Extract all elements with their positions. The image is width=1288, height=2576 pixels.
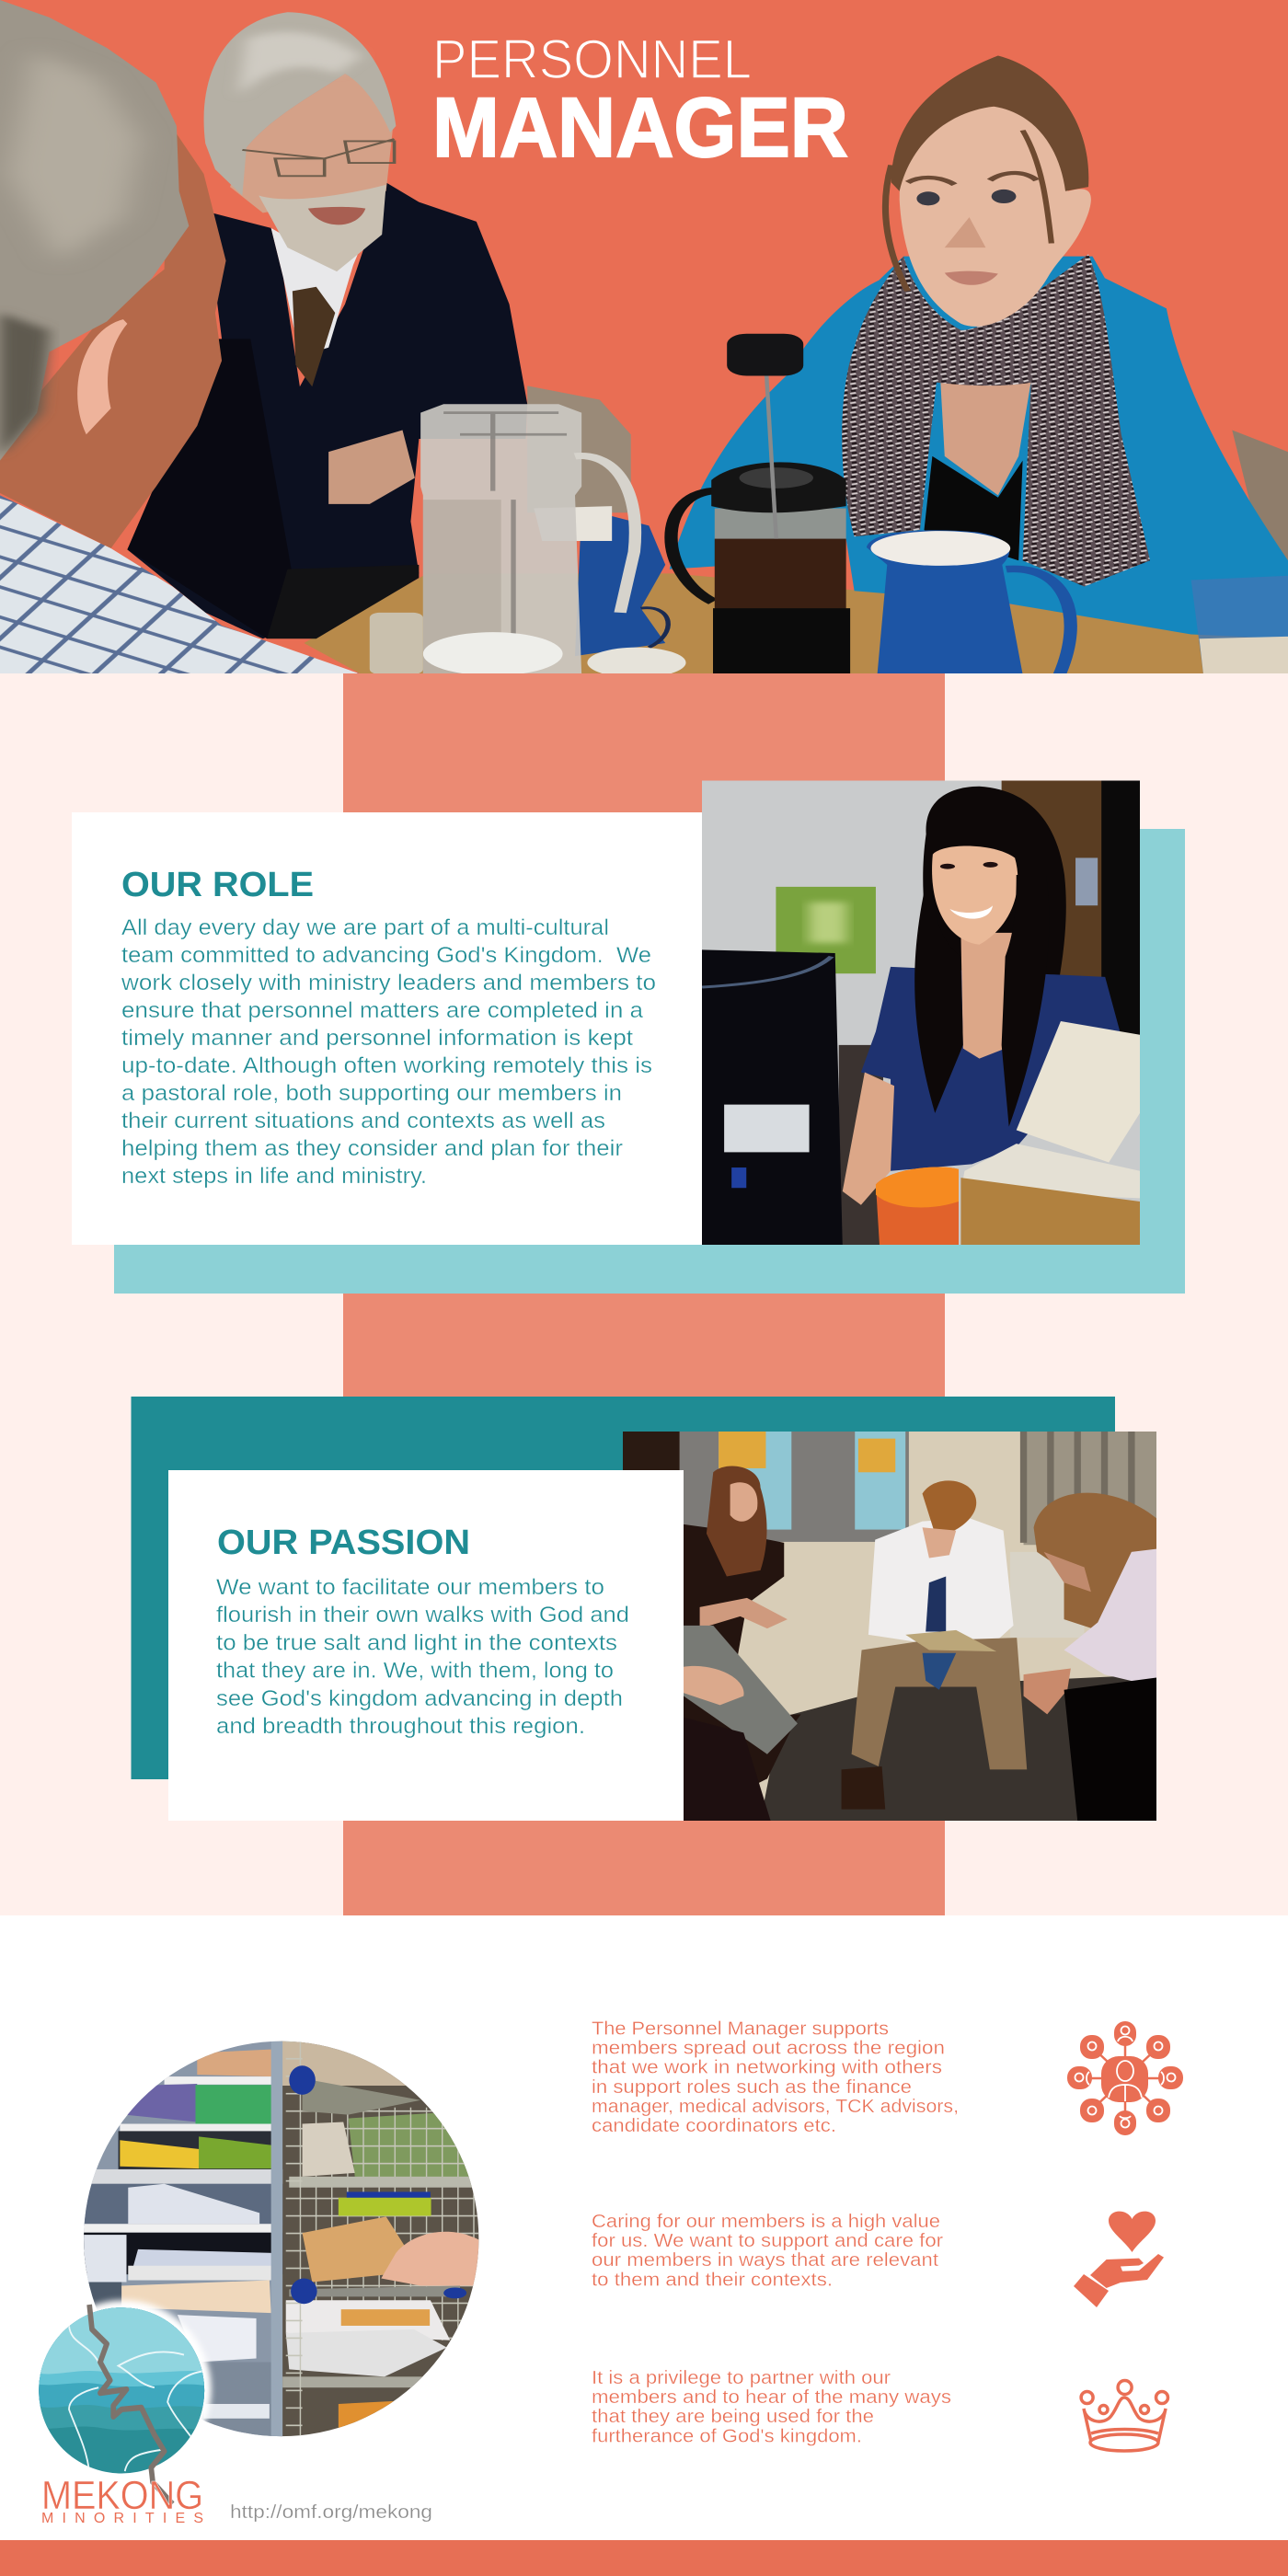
man in sweater — [127, 12, 527, 638]
logo: Mekong Minorities — [39, 2295, 215, 2504]
photo: smiling woman at desk — [702, 780, 1140, 1245]
wordmark: MEKONG: MEKONG — [41, 2473, 203, 2518]
text: support network: in support roles such as the finance — [592, 2077, 912, 2098]
text: caring: Caring for our members is a high value — [592, 2212, 940, 2232]
teal backing block — [114, 829, 1185, 1294]
role body text: next steps in life and ministry. — [121, 1164, 427, 1189]
passion body text: to be true salt and light in the contexts — [216, 1630, 617, 1656]
role body text: up-to-date. Although often working remotely this is — [121, 1053, 652, 1078]
laptop — [127, 339, 300, 638]
text: caring: for us. We want to support and care for — [592, 2231, 943, 2251]
role body text: ensure that personnel matters are completed in a — [121, 998, 644, 1023]
role body text — [121, 915, 656, 1189]
text: support network: manager, medical advisors, TCK advisors, — [592, 2097, 959, 2117]
heading: our passion: OUR PASSION — [217, 1524, 470, 1562]
role body text: their current situations and contexts as well as — [121, 1109, 605, 1133]
white text card — [168, 1470, 684, 1821]
role body text: a pastoral role, both supporting our members in — [121, 1081, 622, 1106]
heading: our role: OUR ROLE — [121, 866, 314, 904]
text: caring — [592, 2212, 943, 2290]
passion body text: see God's kingdom advancing in depth — [216, 1686, 623, 1711]
passion body text: and breadth throughout this region. — [216, 1714, 585, 1739]
logo wordmark — [41, 2473, 203, 2526]
passion body text: that they are in. We, with them, long to — [216, 1658, 614, 1684]
url: http://omf.org/mekong — [230, 2502, 432, 2523]
background: pale pink middle section — [0, 673, 1288, 1915]
text: caring: our members in ways that are relevant — [592, 2250, 938, 2271]
icon: people network — [1067, 2021, 1183, 2135]
text: support network: members spread out across the region — [592, 2039, 945, 2059]
role body text: All day every day we are part of a multi-cultural — [121, 915, 609, 940]
circular photo: mail shelves — [84, 2041, 478, 2436]
role body text: timely manner and personnel information is kept — [121, 1026, 633, 1051]
text: support network: that we work in networking with others — [592, 2058, 942, 2078]
tableware — [370, 334, 1288, 678]
white text card — [72, 812, 702, 1245]
passion body text: flourish in their own walks with God and — [216, 1603, 629, 1627]
dark teal backing block — [131, 1397, 1115, 1779]
text: support network — [592, 2018, 959, 2136]
text: privilege: It is a privilege to partner with our — [592, 2368, 891, 2388]
footer bar — [0, 2540, 1288, 2576]
text: support network: candidate coordinators etc. — [592, 2116, 836, 2136]
title line: PERSONNEL: PERSONNEL — [432, 29, 752, 90]
title line: MANAGER: MANAGER — [432, 81, 848, 175]
text: support network: The Personnel Manager supports — [592, 2018, 889, 2039]
man seen from behind — [0, 0, 362, 674]
icon: hand holding heart — [1074, 2212, 1164, 2307]
header photo: three people at a table — [0, 0, 1288, 673]
text: privilege: that they are being used for the — [592, 2407, 874, 2427]
title — [432, 29, 848, 175]
text: privilege — [592, 2368, 951, 2446]
text: privilege: members and to hear of the many ways — [592, 2387, 951, 2408]
panel: our role — [72, 780, 1185, 1294]
text: privilege: furtherance of God's kingdom. — [592, 2426, 862, 2446]
passion body text — [216, 1575, 629, 1739]
wordmark: MINORITIES: MINORITIES — [41, 2511, 203, 2526]
photo: group praying — [623, 1432, 1156, 1821]
background: salmon vertical band — [343, 673, 945, 1915]
passion body text: We want to facilitate our members to — [216, 1575, 604, 1600]
role body text: helping them as they consider and plan for their — [121, 1136, 623, 1161]
role body text: work closely with ministry leaders and members to — [121, 971, 656, 995]
text: caring: to them and their contexts. — [592, 2270, 833, 2290]
woman — [670, 55, 1288, 638]
icon: crown — [1081, 2381, 1168, 2451]
panel: our passion — [131, 1397, 1156, 1821]
role body text: team committed to advancing God's Kingdom. We — [121, 943, 651, 968]
